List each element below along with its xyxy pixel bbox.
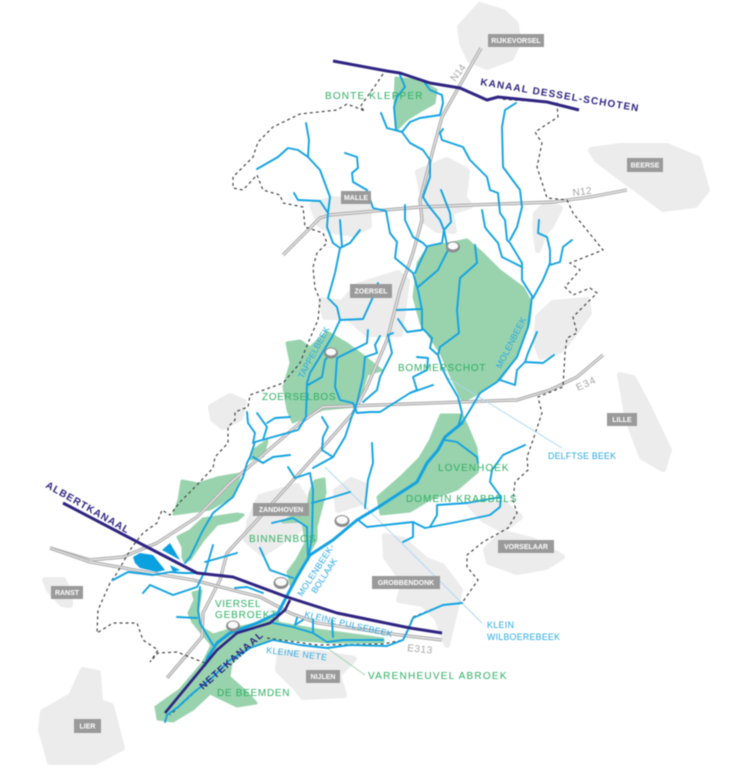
canal: Albertkanaal [63, 503, 442, 633]
label: Lille [607, 413, 637, 426]
label: Binnenbos: BINNENBOS [249, 534, 317, 545]
label: Grobbendonk [372, 576, 440, 589]
label: Malle: MALLE [344, 195, 368, 202]
label: Zoerselbos: ZOERSELBOS [262, 392, 337, 403]
label: Zandhoven: ZANDHOVEN [259, 507, 303, 514]
label: Delftse Beek: DELFTSE BEEK [548, 451, 616, 461]
label: Lille: LILLE [612, 417, 632, 424]
label: Viersel Gebroekt: VIERSEL [215, 599, 262, 610]
stream labels [266, 315, 616, 662]
label: Kleine Nete: KLEINE NETE [266, 645, 328, 662]
label: Molenbeek: MOLENBEEK [494, 315, 528, 370]
town labels [51, 34, 663, 733]
label: Grobbendonk: GROBBENDONK [378, 580, 434, 587]
highways [50, 48, 627, 678]
label: Varenheuvel Abroek: VARENHEUVEL ABROEK [368, 671, 508, 682]
label: E313: E313 [407, 643, 433, 657]
label: Tappelbeek: TAPPELBEEK [296, 325, 332, 380]
label: Nijlen [306, 670, 340, 683]
label: E34: E34 [575, 375, 598, 394]
nature area labels [215, 91, 518, 699]
label: Zoersel: ZOERSEL [354, 288, 388, 296]
road: N12 [283, 190, 627, 255]
gauge icons [226, 242, 460, 632]
canals [63, 61, 579, 713]
label: Kanaal Dessel-Schoten: KANAAL DESSEL-SCHOTEN [480, 77, 639, 114]
label: Lier [74, 719, 101, 733]
canal: Netekanaal [165, 600, 290, 713]
label: Lier: LIER [80, 724, 95, 730]
label: N12: N12 [572, 186, 593, 199]
label: Viersel Gebroekt: GEBROEKT [215, 610, 278, 621]
lake and ponds [133, 543, 180, 572]
label: Bonte Klepper: BONTE KLEPPER [325, 91, 424, 102]
road labels [407, 62, 598, 657]
label: Bommerschot: BOMMERSCHOT [398, 363, 487, 374]
municipal boundary [97, 74, 603, 715]
road: E313 [50, 548, 442, 640]
label: Vorselaar: VORSELAAR [504, 544, 548, 551]
label: Vorselaar [498, 540, 554, 553]
label: Netekanaal: NETEKANAAL [198, 630, 266, 692]
label: Ranst [51, 586, 83, 599]
label: Beerse [627, 158, 663, 172]
label: Rijkevorsel: RIJKEVORSEL [491, 38, 541, 45]
label: De Beemden: DE BEEMDEN [217, 688, 291, 699]
streams [113, 75, 572, 722]
label: Kleine Pulsebeek: KLEINE PULSEBEEK [304, 609, 394, 639]
label: Klein Wilboerebeek: WILBOEREBEEK [487, 632, 560, 642]
canal: Kanaal Dessel-Schoten [333, 61, 579, 110]
canal labels [44, 77, 639, 692]
road: E34 [50, 355, 603, 560]
label: Nijlen: NIJLEN [311, 674, 335, 681]
label: Klein Wilboerebeek: KLEIN [487, 620, 514, 630]
label: Malle [341, 191, 371, 204]
label: Albertkanaal: ALBERTKANAAL [44, 480, 131, 536]
label: Domein Krabbels: DOMEIN KRABBELS [406, 494, 518, 505]
label: Rijkevorsel [488, 34, 544, 47]
label: Ranst: RANST [55, 590, 80, 597]
label: Molenbeek-Bollaak: BOLLAAK [309, 556, 339, 595]
road: N14 [167, 48, 481, 678]
label: Lovenhoek: LOVENHOEK [438, 463, 510, 474]
label: Zandhoven [253, 503, 309, 516]
label: N14: N14 [449, 62, 469, 84]
label: Zoersel [350, 284, 392, 298]
label: Molenbeek-Bollaak: MOLENBEEK- [295, 542, 336, 598]
label: Beerse: BEERSE [631, 162, 660, 170]
nature areas [156, 78, 531, 721]
leader lines [325, 378, 562, 675]
